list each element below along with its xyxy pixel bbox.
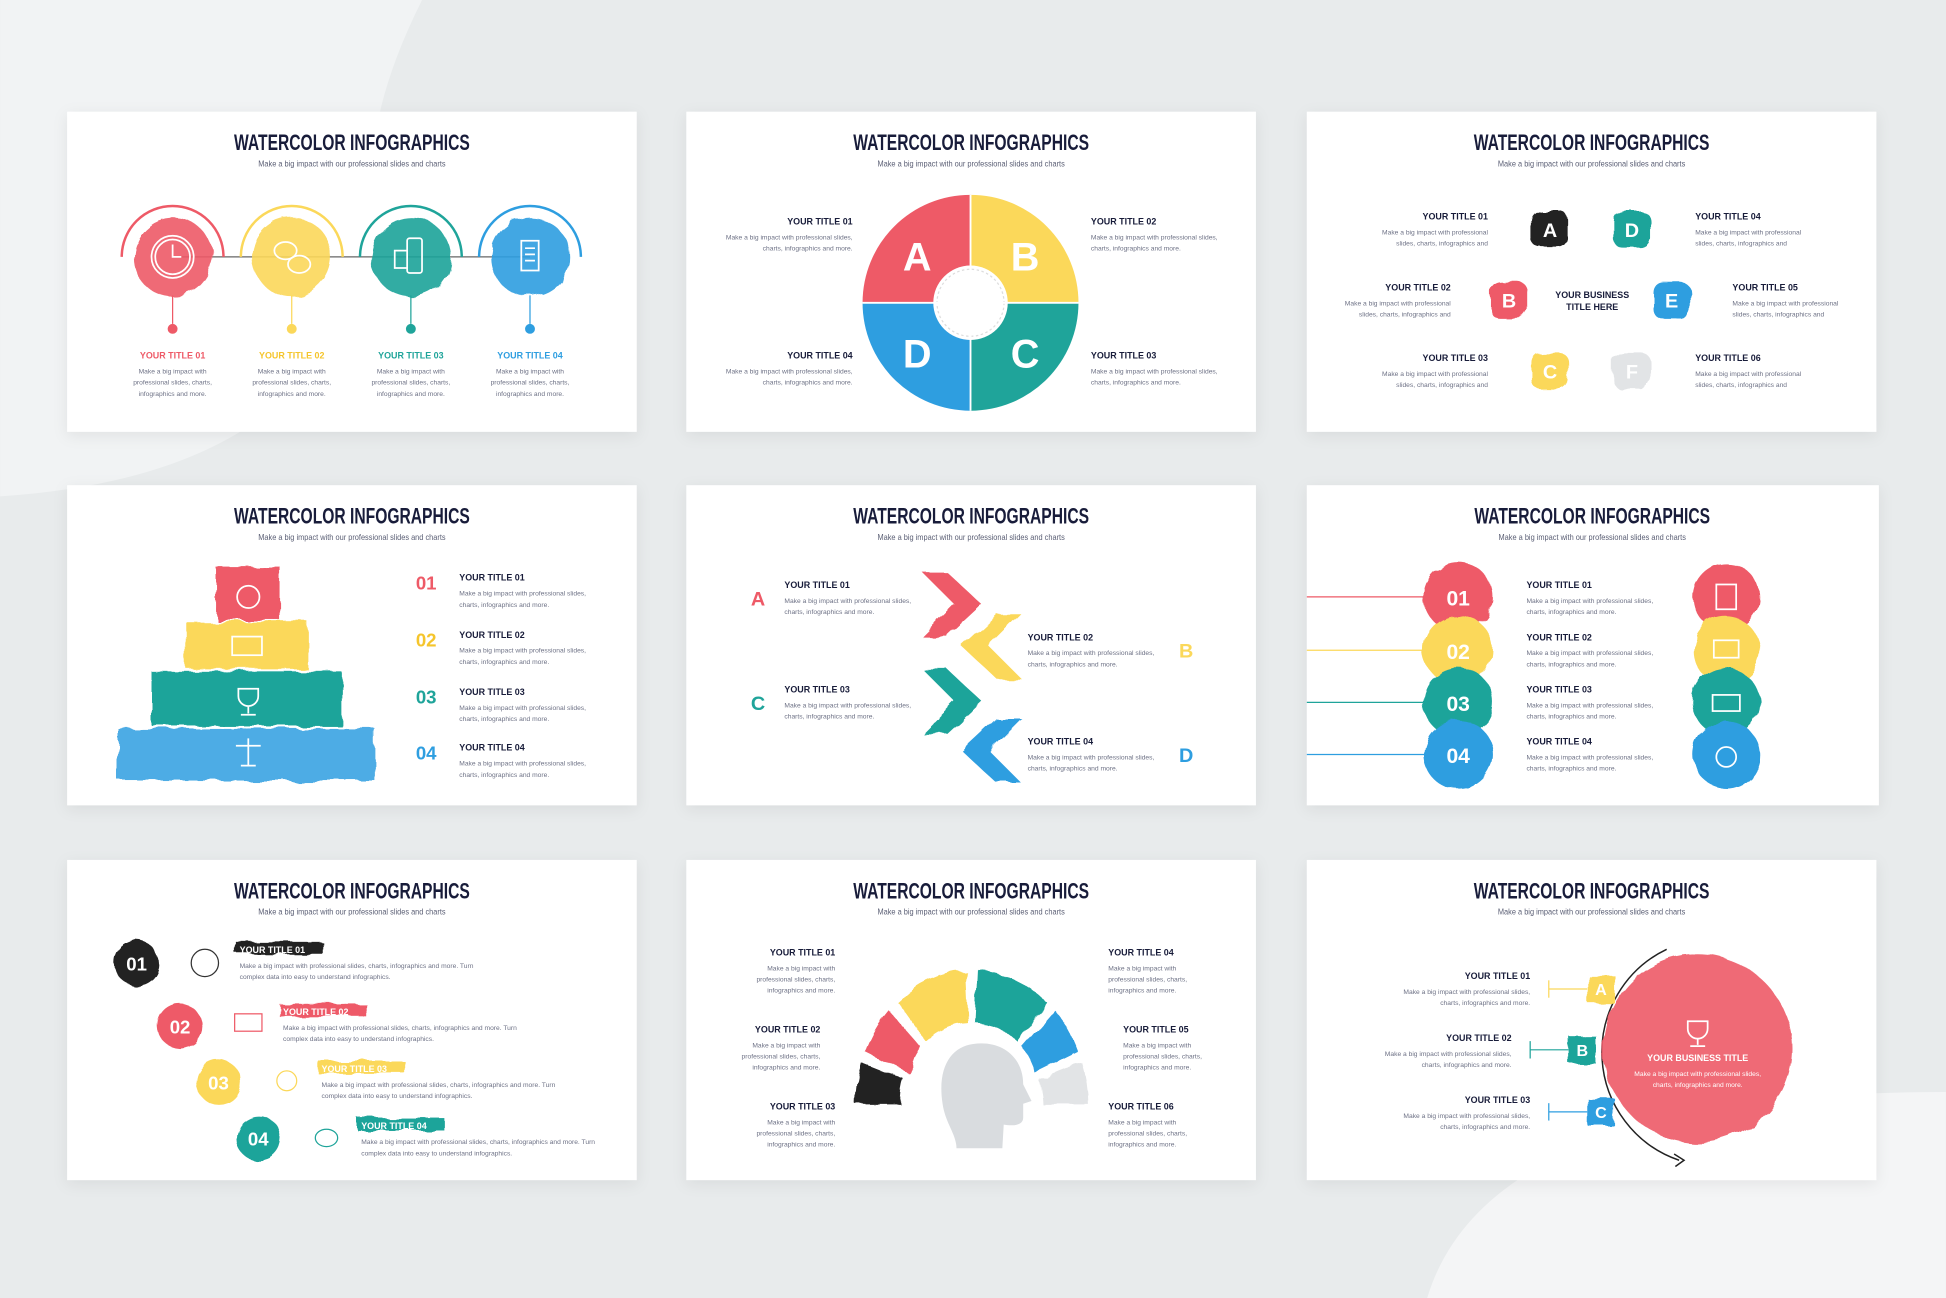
labels: Make a big impact with professional slides, <box>784 702 911 709</box>
labels: charts, infographics and more. <box>784 609 874 616</box>
step 4: YOUR TITLE 04 <box>497 351 563 361</box>
step 1: infographics and more. <box>139 391 207 398</box>
slide 3: hexagon blobs: A <box>1543 220 1557 242</box>
list: YOUR TITLE 02 <box>459 630 525 640</box>
subtitle: Make a big impact with our professional slides and charts <box>1498 907 1685 917</box>
title: WATERCOLOR INFOGRAPHICS <box>234 130 470 155</box>
slide 2: puzzle ring <box>686 112 1256 432</box>
title: WATERCOLOR INFOGRAPHICS <box>853 130 1089 155</box>
arc segments <box>855 970 1088 1104</box>
slide 8: head arc <box>686 860 1256 1180</box>
labels: charts, infographics and more. <box>1028 766 1118 773</box>
puzzle ring: D <box>903 332 931 376</box>
slide 6: numbered circles: 01 <box>1446 588 1470 611</box>
labels: Make a big impact with professional <box>1345 300 1451 307</box>
step 3: infographics and more. <box>377 391 445 398</box>
labels: YOUR TITLE 01 <box>1423 212 1488 222</box>
labels: A <box>751 589 765 611</box>
labels: charts, infographics and more. <box>763 246 853 253</box>
step 3: Make a big impact with <box>377 369 445 376</box>
rows: complex data into easy to understand infographics. <box>361 1150 512 1157</box>
slide 3: hexagon blobs: F <box>1626 361 1638 383</box>
labels: Make a big impact with <box>1108 1119 1177 1126</box>
title: WATERCOLOR INFOGRAPHICS <box>853 504 1089 529</box>
labels: professional slides, charts, <box>1108 977 1187 984</box>
labels: infographics and more. <box>767 988 835 995</box>
labels: Make a big impact with professional slides, <box>726 234 853 241</box>
step 3 <box>360 206 462 398</box>
labels: YOUR TITLE 05 <box>1732 282 1798 292</box>
labels: charts, infographics and more. <box>1028 661 1118 668</box>
rows <box>240 945 595 1157</box>
step 3: YOUR TITLE 03 <box>378 351 444 361</box>
subtitle: Make a big impact with our professional slides and charts <box>877 532 1065 542</box>
slide 9: big circle: charts, infographics and more. <box>1653 1082 1743 1089</box>
list: 01 <box>416 572 437 593</box>
slide 6: numbered circles: 03 <box>1446 693 1470 716</box>
head <box>941 1043 1032 1148</box>
labels: YOUR TITLE 01 <box>784 580 850 590</box>
rows: YOUR TITLE 02 <box>283 1007 349 1017</box>
labels: Make a big impact with professional slides, <box>1526 598 1653 605</box>
labels: Make a big impact with professional <box>1382 371 1488 378</box>
puzzle ring: C <box>1011 332 1039 376</box>
labels: professional slides, charts, <box>1108 1130 1187 1137</box>
step 2: Make a big impact with <box>258 369 326 376</box>
center text <box>1555 290 1629 312</box>
rows: YOUR TITLE 04 <box>361 1121 427 1131</box>
labels: YOUR TITLE 04 <box>1108 948 1174 958</box>
slide 4: pyramid <box>67 485 637 805</box>
labels: YOUR TITLE 02 <box>1385 282 1451 292</box>
labels: Make a big impact with professional slides, <box>784 598 911 605</box>
step 3: professional slides, charts, <box>371 380 450 387</box>
labels: Make a big impact with professional slides, <box>1091 234 1218 241</box>
labels: Make a big impact with professional <box>1382 230 1488 237</box>
labels: YOUR TITLE 01 <box>1465 971 1530 981</box>
step 1: YOUR TITLE 01 <box>140 351 205 361</box>
labels: YOUR TITLE 01 <box>1526 580 1592 590</box>
labels: Make a big impact with professional slides, <box>1526 702 1653 709</box>
list: YOUR TITLE 01 <box>459 573 525 583</box>
labels: slides, charts, infographics and <box>1359 311 1451 318</box>
list: YOUR TITLE 04 <box>459 743 525 753</box>
subtitle: Make a big impact with our professional slides and charts <box>258 158 446 168</box>
labels: YOUR TITLE 03 <box>1465 1095 1530 1105</box>
labels: slides, charts, infographics and <box>1695 382 1787 389</box>
labels: professional slides, charts, <box>756 1130 835 1137</box>
labels: Make a big impact with <box>1108 965 1177 972</box>
list: charts, infographics and more. <box>459 659 549 666</box>
title: WATERCOLOR INFOGRAPHICS <box>234 878 470 903</box>
step 4: professional slides, charts, <box>491 380 570 387</box>
slide 9: big circle: YOUR BUSINESS TITLE <box>1647 1053 1748 1063</box>
labels: YOUR TITLE 02 <box>1446 1033 1512 1043</box>
rows: complex data into easy to understand infographics. <box>240 974 391 981</box>
slide 9: big circle: B <box>1576 1042 1588 1060</box>
list: Make a big impact with professional slides, <box>459 761 586 768</box>
labels: charts, infographics and more. <box>763 380 853 387</box>
labels: Make a big impact with professional slides, <box>1028 754 1154 761</box>
labels <box>751 580 1193 773</box>
labels: Make a big impact with professional slides, <box>1091 369 1218 376</box>
list: charts, infographics and more. <box>459 602 549 609</box>
step 2 <box>241 206 343 398</box>
list: Make a big impact with professional slides, <box>459 705 586 712</box>
labels: Make a big impact with professional slides, <box>726 369 853 376</box>
labels: Make a big impact with <box>752 1042 821 1049</box>
labels: Make a big impact with <box>1123 1042 1191 1049</box>
subtitle: Make a big impact with our professional slides and charts <box>258 907 446 917</box>
labels: charts, infographics and more. <box>1526 609 1617 616</box>
rows: complex data into easy to understand infographics. <box>322 1093 473 1100</box>
slide 3: hexagon blobs <box>1307 112 1876 432</box>
blobs <box>1490 211 1690 390</box>
slide 9: big circle: C <box>1595 1104 1607 1122</box>
labels <box>742 948 1202 1149</box>
rows: YOUR TITLE 03 <box>322 1064 387 1074</box>
labels: slides, charts, infographics and <box>1732 311 1825 318</box>
rows: complex data into easy to understand infographics. <box>283 1036 434 1043</box>
squares <box>1569 975 1615 1126</box>
labels: charts, infographics and more. <box>1526 713 1617 720</box>
labels: YOUR TITLE 05 <box>1123 1024 1189 1034</box>
slide 7: list with brush titles: 04 <box>248 1128 269 1149</box>
title: WATERCOLOR INFOGRAPHICS <box>1474 504 1710 529</box>
step 2: professional slides, charts, <box>252 380 331 387</box>
labels: Make a big impact with professional slides, <box>1403 989 1530 996</box>
rows: Make a big impact with professional slides, charts, infographics and more. Turn <box>361 1139 595 1146</box>
labels: slides, charts, infographics and <box>1695 241 1787 248</box>
labels: slides, charts, infographics and <box>1396 241 1488 248</box>
center text: YOUR BUSINESS <box>1555 290 1629 300</box>
slide 3: hexagon blobs: D <box>1625 220 1639 242</box>
step 1: Make a big impact with <box>139 369 207 376</box>
subtitle: Make a big impact with our professional slides and charts <box>1498 158 1685 168</box>
labels: YOUR TITLE 01 <box>770 948 835 958</box>
labels: YOUR TITLE 04 <box>1526 737 1592 747</box>
list: 02 <box>416 630 437 651</box>
labels: professional slides, charts, <box>742 1054 820 1061</box>
list <box>416 572 586 779</box>
labels: YOUR TITLE 04 <box>1695 212 1761 222</box>
list: charts, infographics and more. <box>459 716 549 723</box>
labels: charts, infographics and more. <box>1526 661 1617 668</box>
labels: YOUR TITLE 04 <box>787 351 853 361</box>
labels: Make a big impact with <box>767 1119 836 1126</box>
labels: infographics and more. <box>752 1065 821 1072</box>
subtitle: Make a big impact with our professional slides and charts <box>877 158 1065 168</box>
labels: charts, infographics and more. <box>1526 766 1617 773</box>
labels: infographics and more. <box>1108 988 1176 995</box>
slide 7: list with brush titles: 03 <box>208 1073 229 1094</box>
pyramid <box>118 567 375 781</box>
labels: Make a big impact with <box>767 965 836 972</box>
labels: charts, infographics and more. <box>784 713 874 720</box>
labels: C <box>751 693 765 715</box>
labels: YOUR TITLE 02 <box>1526 632 1592 642</box>
labels: YOUR TITLE 03 <box>1526 684 1592 694</box>
labels: professional slides, charts, <box>1123 1054 1202 1061</box>
labels: charts, infographics and more. <box>1091 380 1181 387</box>
slide 7: list with brush titles: 02 <box>170 1017 190 1038</box>
center text: TITLE HERE <box>1566 302 1618 312</box>
labels: B <box>1179 641 1193 663</box>
labels: YOUR TITLE 03 <box>1091 351 1156 361</box>
labels: YOUR TITLE 06 <box>1695 353 1761 363</box>
labels <box>1385 971 1530 1131</box>
list: Make a big impact with professional slides, <box>459 648 586 655</box>
labels: charts, infographics and more. <box>1440 1000 1530 1007</box>
puzzle ring <box>863 195 1078 411</box>
puzzle ring: A <box>903 236 931 280</box>
title: WATERCOLOR INFOGRAPHICS <box>853 878 1089 903</box>
list: Make a big impact with professional slides, <box>459 591 586 598</box>
labels: D <box>1179 745 1193 767</box>
slide 3: hexagon blobs: C <box>1543 361 1557 383</box>
labels: infographics and more. <box>1123 1065 1191 1072</box>
labels: Make a big impact with professional slides, <box>1385 1051 1512 1058</box>
labels: charts, infographics and more. <box>1422 1062 1512 1069</box>
labels: YOUR TITLE 02 <box>1028 632 1093 642</box>
slide 1: circles timeline <box>67 112 637 432</box>
labels: charts, infographics and more. <box>1440 1124 1530 1131</box>
list: charts, infographics and more. <box>459 772 549 779</box>
slide 9: big circle <box>1307 860 1876 1180</box>
slide 9: big circle: Make a big impact with professional slides, <box>1634 1071 1761 1078</box>
labels: professional slides, charts, <box>756 977 835 984</box>
chevrons <box>922 572 1021 783</box>
subtitle: Make a big impact with our professional slides and charts <box>1499 532 1686 542</box>
list: 04 <box>416 742 437 763</box>
step 4 <box>479 206 581 398</box>
slide 5: chevrons <box>686 485 1256 805</box>
slide 7: list with brush titles <box>67 860 637 1180</box>
puzzle ring: B <box>1011 236 1039 280</box>
slide 9: big circle: A <box>1595 981 1607 999</box>
labels: Make a big impact with professional slides, <box>1403 1113 1530 1120</box>
labels: slides, charts, infographics and <box>1396 382 1488 389</box>
rows: Make a big impact with professional slides, charts, infographics and more. Turn <box>322 1082 556 1089</box>
labels: YOUR TITLE 02 <box>1091 217 1156 227</box>
slide 7: list with brush titles: 01 <box>126 953 147 974</box>
labels: YOUR TITLE 03 <box>770 1101 835 1111</box>
labels: YOUR TITLE 02 <box>755 1024 820 1034</box>
labels: YOUR TITLE 03 <box>1423 353 1488 363</box>
step 4: infographics and more. <box>496 391 564 398</box>
labels: Make a big impact with professional slides, <box>1526 754 1653 761</box>
list: YOUR TITLE 03 <box>459 687 525 697</box>
labels: Make a big impact with professional slides, <box>1028 650 1154 657</box>
labels: infographics and more. <box>1108 1142 1176 1149</box>
step 4: Make a big impact with <box>496 369 564 376</box>
labels: Make a big impact with professional <box>1695 371 1802 378</box>
labels: Make a big impact with professional <box>1732 300 1839 307</box>
arc arrow <box>1602 949 1679 1160</box>
title: WATERCOLOR INFOGRAPHICS <box>1474 130 1710 155</box>
slide 6: numbered circles <box>1307 485 1879 805</box>
labels <box>1526 580 1653 773</box>
labels: YOUR TITLE 01 <box>787 217 853 227</box>
labels: Make a big impact with professional <box>1695 230 1802 237</box>
step 2: infographics and more. <box>258 391 326 398</box>
step 2: YOUR TITLE 02 <box>259 351 324 361</box>
subtitle: Make a big impact with our professional slides and charts <box>258 532 446 542</box>
rows: Make a big impact with professional slides, charts, infographics and more. Turn <box>240 963 474 970</box>
slide 6: numbered circles: 04 <box>1446 745 1470 768</box>
labels: YOUR TITLE 06 <box>1108 1101 1174 1111</box>
title: WATERCOLOR INFOGRAPHICS <box>234 504 470 529</box>
step 1: professional slides, charts, <box>133 380 212 387</box>
slide 3: hexagon blobs: E <box>1665 291 1678 313</box>
rows: Make a big impact with professional slides, charts, infographics and more. Turn <box>283 1025 517 1032</box>
big blob <box>1603 954 1792 1143</box>
labels: YOUR TITLE 03 <box>784 684 850 694</box>
subtitle: Make a big impact with our professional slides and charts <box>877 907 1065 917</box>
title: WATERCOLOR INFOGRAPHICS <box>1474 878 1710 903</box>
slide 3: hexagon blobs: B <box>1502 291 1516 313</box>
labels: YOUR TITLE 04 <box>1028 737 1093 747</box>
labels <box>1345 212 1839 389</box>
labels: Make a big impact with professional slides, <box>1526 650 1653 657</box>
step 1 <box>122 206 223 398</box>
slide 6: numbered circles: 02 <box>1446 641 1470 664</box>
labels: infographics and more. <box>767 1142 835 1149</box>
labels <box>726 217 1218 387</box>
labels: charts, infographics and more. <box>1091 246 1181 253</box>
rows: YOUR TITLE 01 <box>240 945 305 955</box>
list: 03 <box>416 687 437 708</box>
